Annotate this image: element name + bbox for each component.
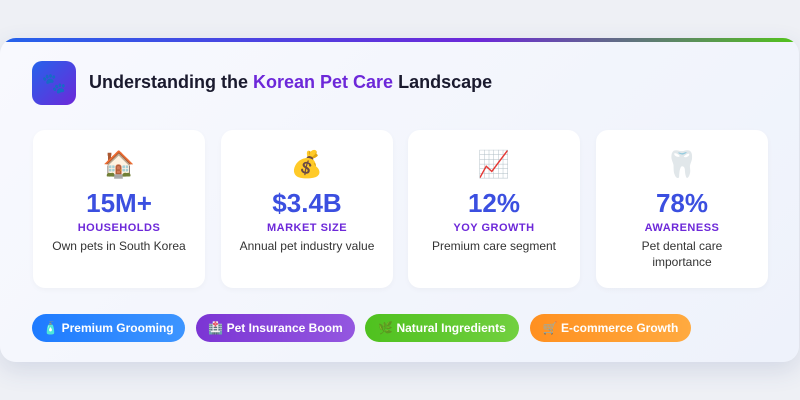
- icon: paws: [32, 61, 76, 105]
- stat: awareness: Pet dental care: [642, 239, 722, 253]
- pill: natural: [365, 314, 519, 342]
- stat: yoy growth: 12%: [468, 188, 520, 218]
- icon: paws: 🐾: [42, 72, 66, 94]
- stat: market size: [221, 130, 393, 288]
- pill: insurance: [196, 314, 355, 342]
- pill: natural: 🌿 Natural Ingredients: [378, 321, 506, 335]
- stat: yoy growth: YOY GROWTH: [453, 222, 535, 234]
- title: Understanding the Korean Pet Care Landscape: [89, 72, 492, 92]
- stat: awareness: AWARENESS: [645, 222, 719, 234]
- stat: market size: MARKET SIZE: [267, 222, 347, 234]
- stat: yoy growth: 📈: [478, 149, 510, 179]
- stat: awareness: importance: [652, 255, 712, 269]
- stat: market size: Annual pet industry value: [240, 239, 374, 253]
- stat: awareness: 78%: [656, 188, 708, 218]
- stat: yoy growth: Premium care segment: [432, 239, 556, 253]
- stat: households: 15M+: [86, 188, 152, 218]
- pill: ecommerce: 🛒 E-commerce Growth: [543, 321, 678, 335]
- stat: households: 🏠: [103, 149, 135, 179]
- stat: awareness: 🦷: [666, 149, 698, 179]
- stat: households: [33, 130, 205, 288]
- pill: grooming: [32, 314, 185, 342]
- pill: insurance: 🏥 Pet Insurance Boom: [208, 321, 343, 335]
- pill: ecommerce: [530, 314, 691, 342]
- stat: yoy growth: [408, 130, 580, 288]
- pill: grooming: 🧴 Premium Grooming: [43, 321, 174, 335]
- stat: households: HOUSEHOLDS: [78, 222, 160, 234]
- stat: households: Own pets in South Korea: [52, 239, 186, 253]
- stat: awareness: [596, 130, 768, 288]
- stat: market size: $3.4B: [272, 188, 342, 218]
- stat: market size: 💰: [291, 149, 323, 179]
